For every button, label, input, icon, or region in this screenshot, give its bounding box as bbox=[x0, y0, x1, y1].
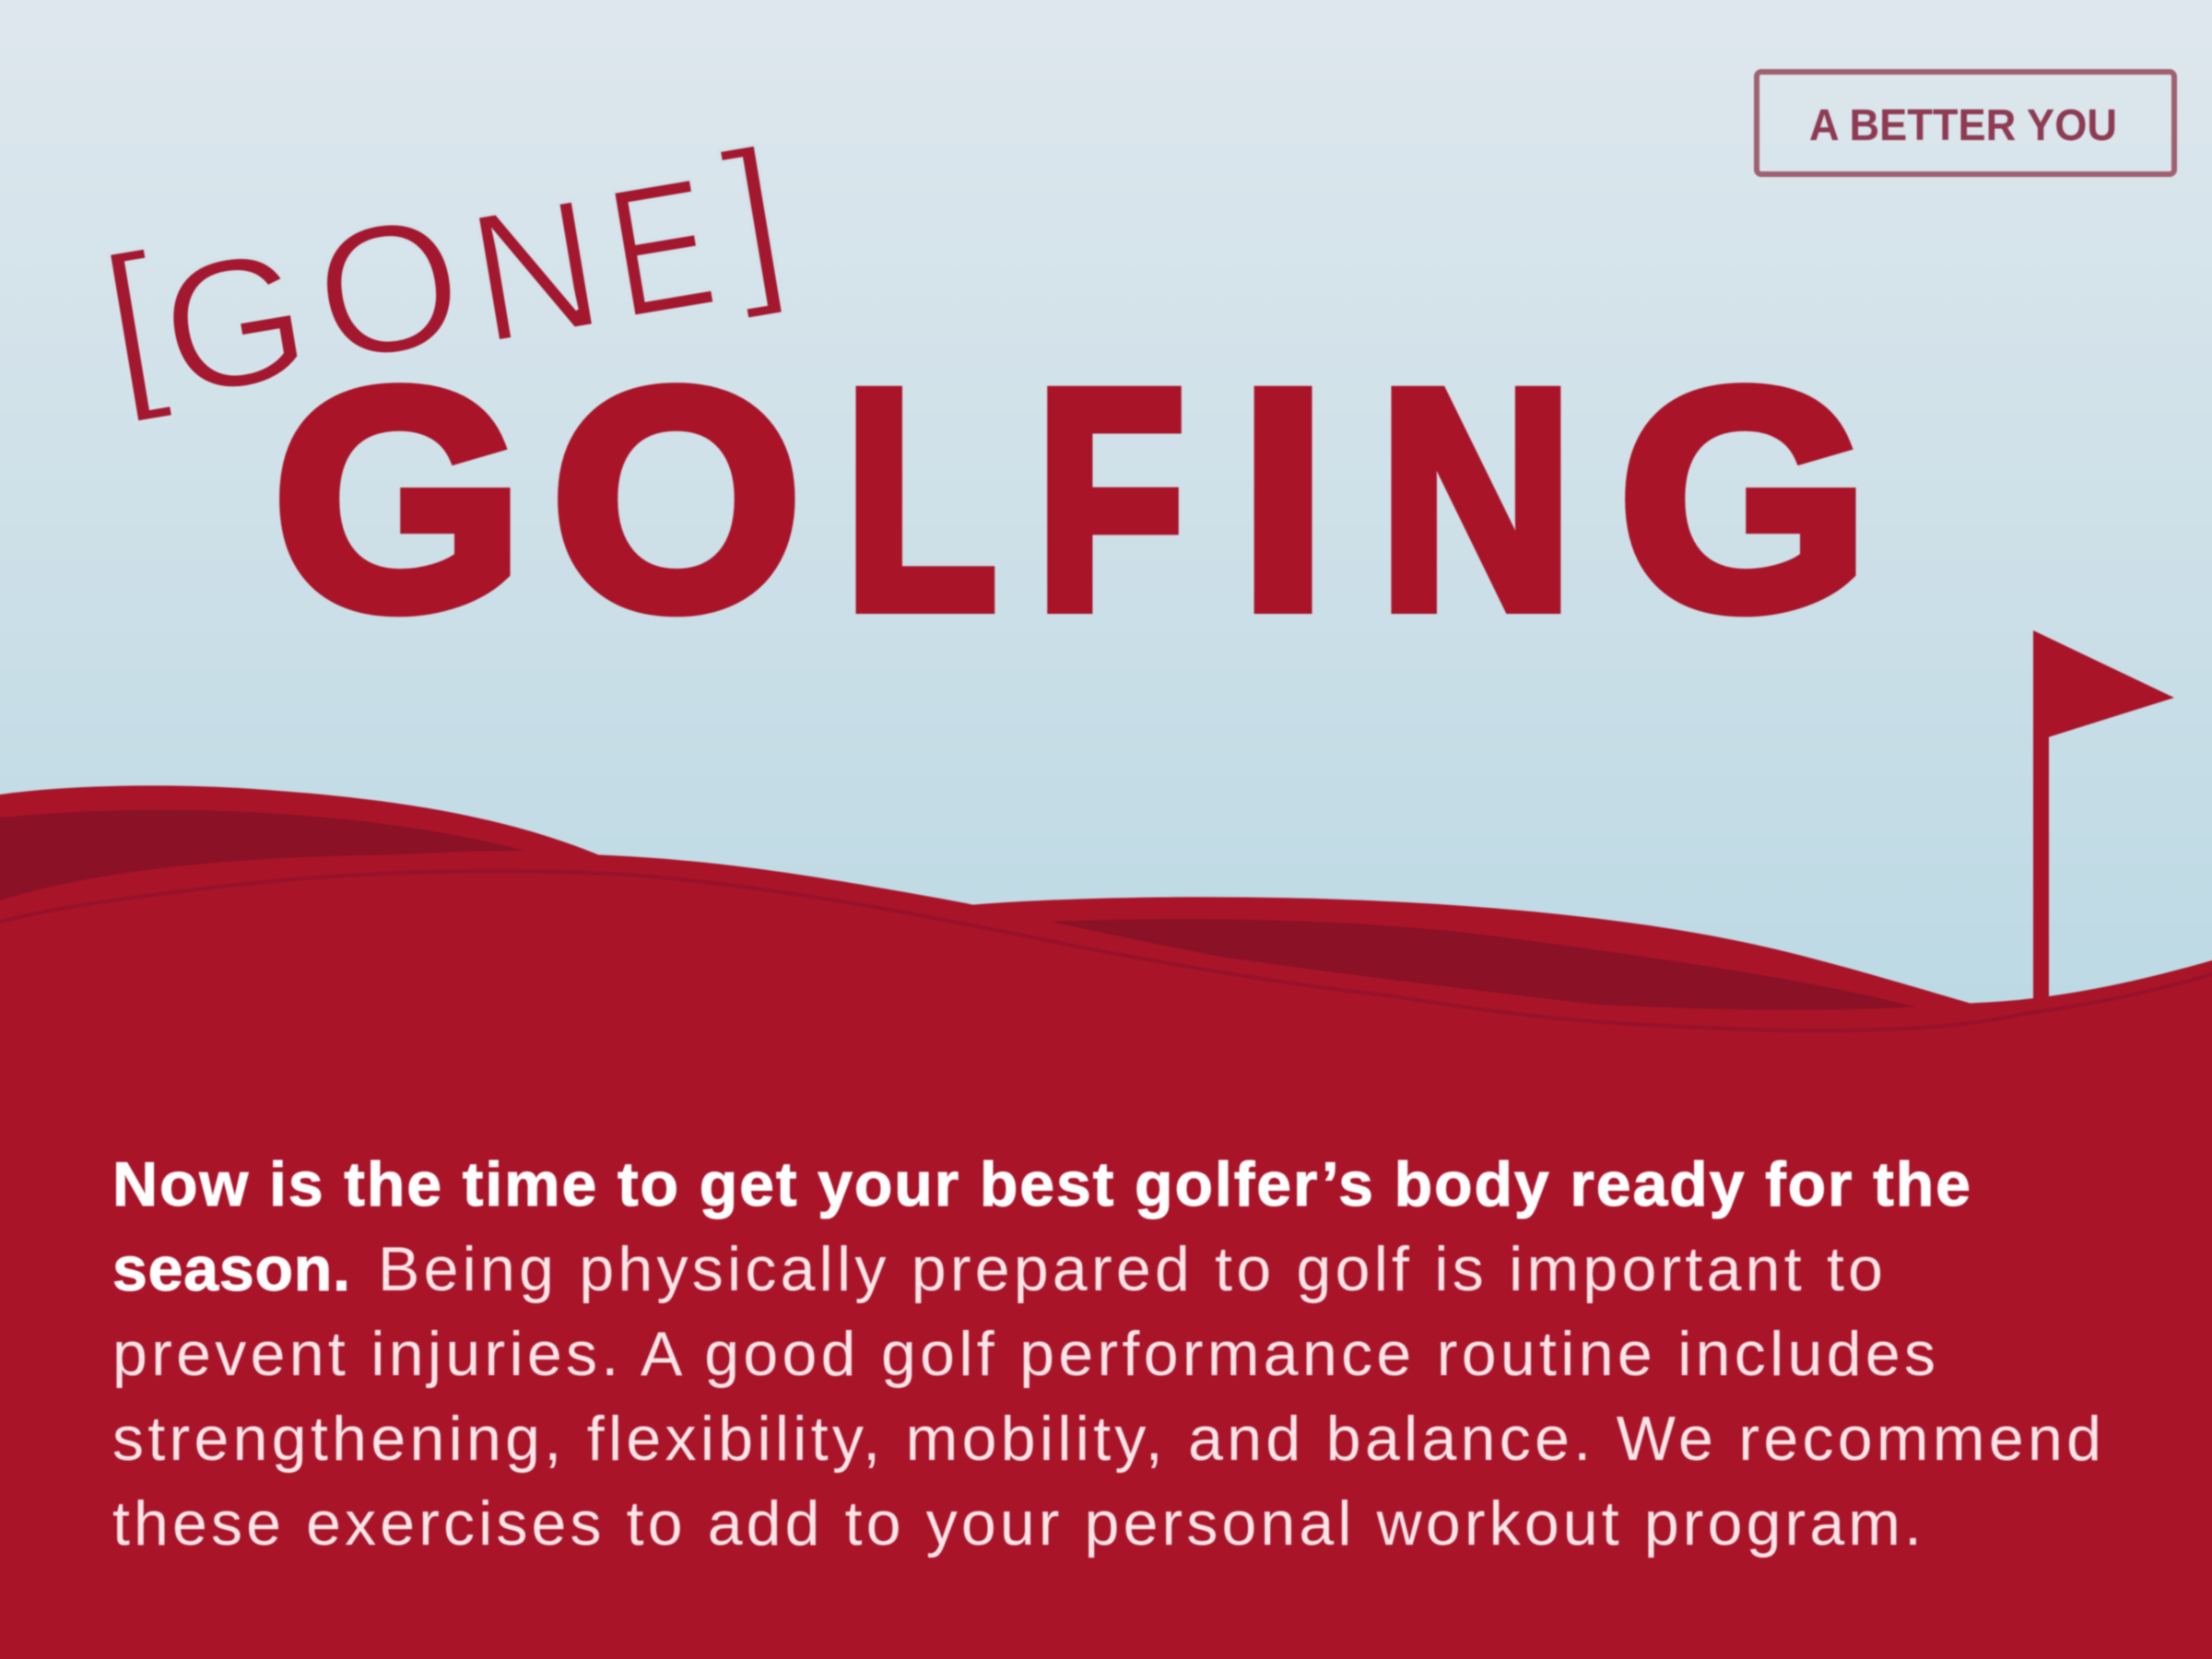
line 1 bold: Now is the time to get your best golfer’s body ready for the bbox=[112, 1149, 1971, 1219]
heading: GOLFING: G bbox=[1618, 324, 1869, 674]
sky background bbox=[0, 0, 2212, 1014]
heading: GOLFING: G bbox=[273, 324, 524, 674]
heading: GOLFING: I bbox=[1240, 324, 1326, 674]
heading: [GONE]: G bbox=[147, 211, 322, 436]
heading: GOLFING: L bbox=[844, 324, 997, 674]
line 3: prevent injuries. A good golf performance routine includes bbox=[112, 1319, 1936, 1389]
heading: GOLFING: N bbox=[1379, 324, 1573, 674]
illustration: rolling hills bbox=[0, 785, 2212, 1659]
icon: golf flag bbox=[2033, 630, 2174, 1009]
heading: [GONE] bbox=[90, 111, 800, 445]
text block: introduction bbox=[112, 1149, 2101, 1559]
line 2 regular: Being physically prepared to golf is important to bbox=[378, 1234, 1883, 1304]
heading: [GONE]: N bbox=[457, 160, 614, 382]
heading: GOLFING: O bbox=[551, 324, 802, 674]
heading: [GONE]: ] bbox=[712, 111, 796, 321]
badge: A Better You: A BETTER YOU bbox=[1809, 101, 2117, 150]
heading: [GONE]: [ bbox=[90, 216, 175, 426]
line 4: strengthening, flexibility, mobility, and balance. We recommend bbox=[112, 1404, 2101, 1474]
heading: GOLFING: F bbox=[1036, 324, 1185, 674]
badge: A Better You bbox=[1757, 72, 2174, 174]
line 2 bold: season. bbox=[112, 1234, 350, 1304]
heading: [GONE]: O bbox=[301, 177, 477, 402]
heading: [GONE]: E bbox=[595, 139, 727, 358]
line 5: these exercises to add to your personal workout program. bbox=[112, 1488, 1922, 1559]
